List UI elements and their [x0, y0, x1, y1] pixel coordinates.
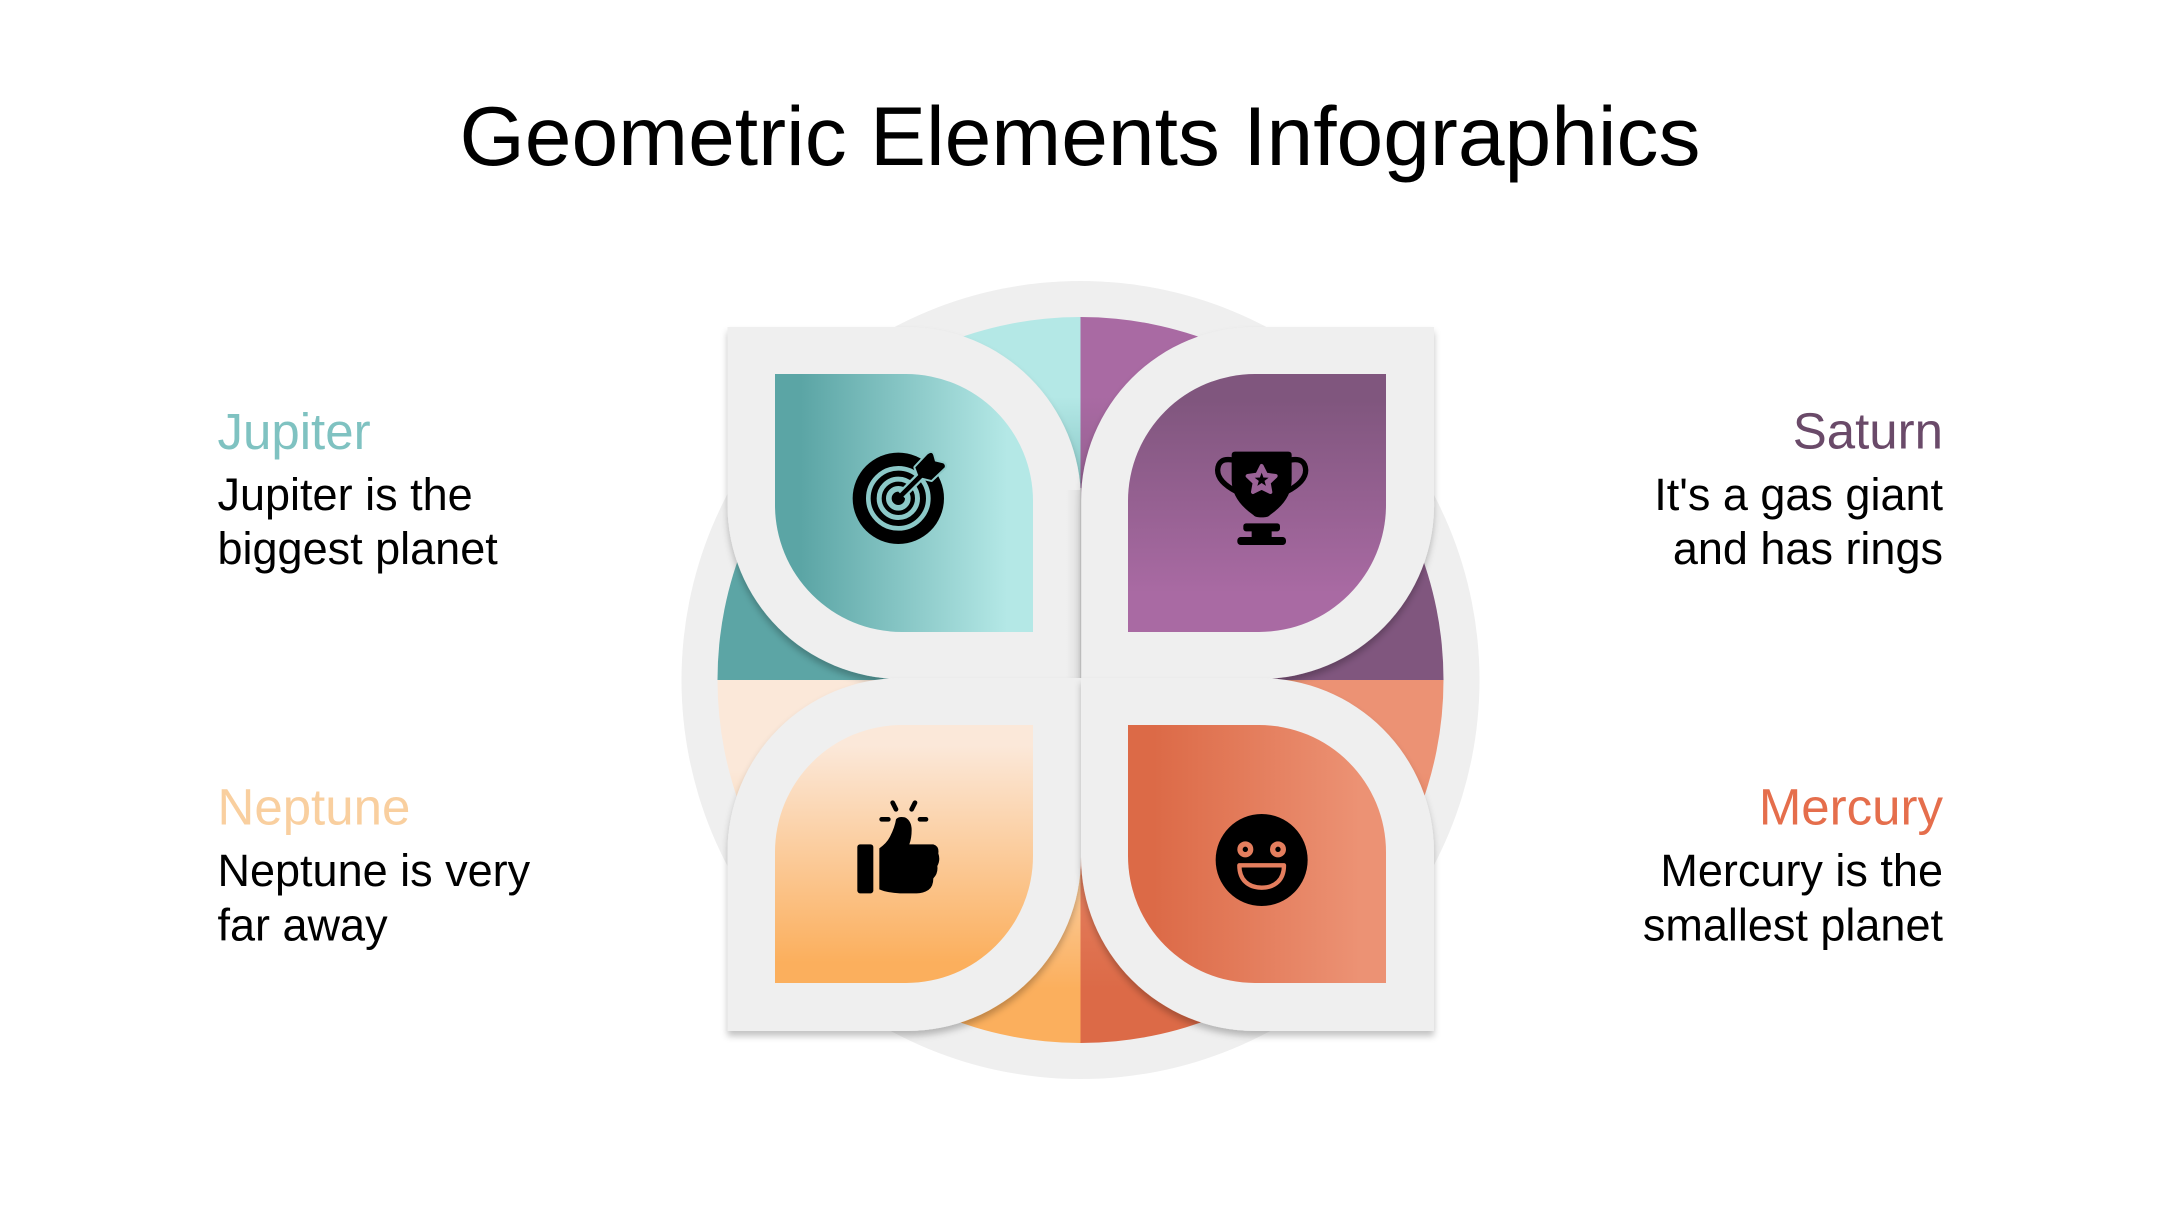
tile: Neptune — [728, 678, 1081, 1031]
tile frame: Mercury — [1081, 678, 1434, 1031]
description: Mercury: Mercury is the — [1660, 845, 1943, 896]
heading: Saturn: Saturn — [1793, 402, 1943, 459]
text block: Mercury — [1643, 779, 1943, 950]
tile: Mercury — [1081, 678, 1434, 1031]
description: Saturn: It's a gas giant — [1654, 469, 1943, 520]
title: Geometric Elements Infographics — [460, 89, 1700, 183]
tile fill: Saturn — [1128, 374, 1386, 632]
description: Mercury: smallest planet — [1643, 900, 1943, 950]
pie quarter: Neptune — [718, 680, 1080, 1043]
diagram: petal circle — [682, 281, 1480, 1079]
description: Neptune: far away — [218, 900, 388, 950]
tile: Saturn — [1081, 327, 1434, 679]
text block: Saturn — [1654, 402, 1943, 574]
tile fill: Mercury — [1128, 725, 1386, 983]
description: Neptune: Neptune is very — [218, 845, 531, 896]
icon: smiley face — [1216, 814, 1308, 906]
text block: Jupiter — [218, 403, 498, 574]
tile frame: Neptune — [728, 678, 1081, 1031]
tile frame: Jupiter — [728, 327, 1081, 679]
description: Saturn: and has rings — [1673, 523, 1943, 574]
pie quarter: Jupiter — [718, 317, 1080, 680]
heading: Neptune: Neptune — [218, 779, 410, 836]
tile frame: Saturn — [1081, 327, 1434, 679]
heading: Mercury: Mercury — [1759, 779, 1943, 836]
tile fill: Jupiter — [775, 374, 1033, 632]
outer grey circle — [682, 281, 1480, 1079]
icon: trophy with star — [1218, 452, 1306, 545]
tile: Jupiter — [728, 327, 1081, 679]
icon: thumbs up — [857, 803, 939, 893]
icon: target with arrow — [853, 453, 945, 544]
tile fill: Neptune — [775, 725, 1033, 983]
heading: Jupiter: Jupiter — [218, 403, 371, 460]
description: Jupiter: biggest planet — [218, 523, 498, 574]
description: Jupiter: Jupiter is the — [218, 469, 473, 520]
pie quarter: Mercury — [1080, 680, 1444, 1043]
text block: Neptune — [218, 779, 531, 950]
pie quarter: Saturn — [1080, 317, 1444, 680]
